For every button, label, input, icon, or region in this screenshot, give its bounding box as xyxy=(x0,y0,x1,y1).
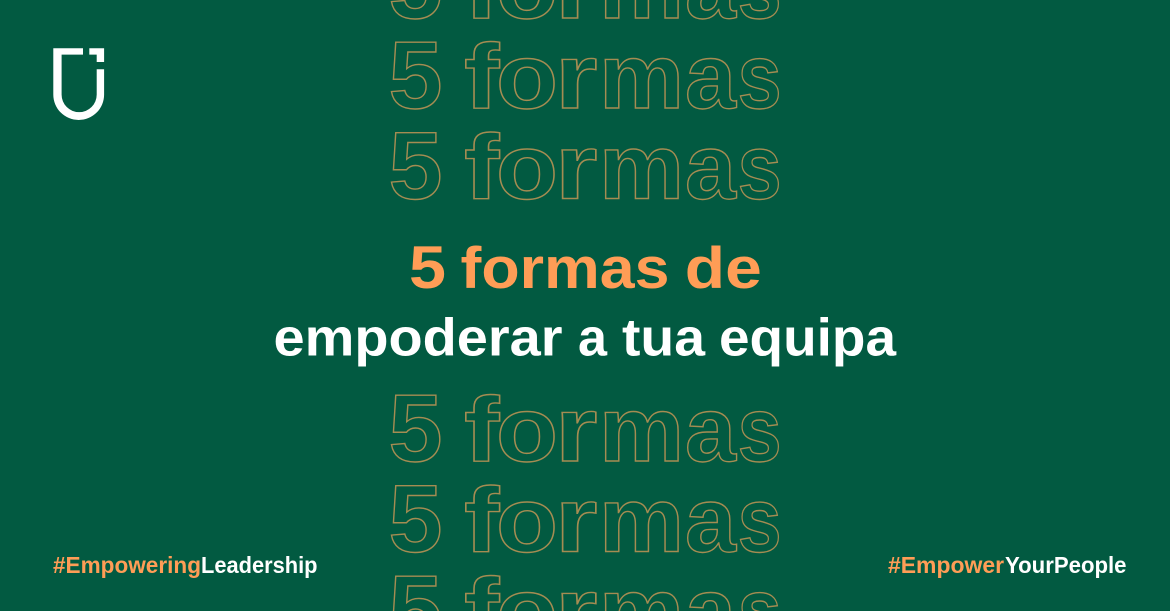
outlined repeated text: top group: f xyxy=(464,26,500,128)
hashtag: EmpowerYourPeople: YourPeople xyxy=(1005,552,1126,578)
outlined repeated text: top group: a xyxy=(685,26,737,128)
hashtag: EmpoweringLeadership xyxy=(53,552,318,578)
outlined repeated text: bottom group xyxy=(388,375,782,611)
subtitle: empoderar a tua equipa: a xyxy=(578,308,608,368)
subtitle: empoderar a tua equipa: equipa xyxy=(719,308,897,368)
title: 5 formas de: formas xyxy=(460,236,670,301)
hashtag: EmpowerYourPeople xyxy=(888,552,1126,578)
outlined repeated text: bottom group: 5 xyxy=(388,466,442,572)
outlined repeated text: bottom group: r xyxy=(555,470,598,572)
outlined repeated text: top group: o xyxy=(496,116,558,218)
outlined repeated text: top group: 5 xyxy=(388,22,442,129)
hashtag: EmpowerYourPeople: #Empower xyxy=(888,552,1004,578)
outlined repeated text: top group xyxy=(388,0,782,220)
outlined repeated text: bottom group: s xyxy=(738,470,782,572)
hashtag: EmpoweringLeadership: #Empowering xyxy=(53,552,201,578)
outlined repeated text: bottom group: o xyxy=(496,379,558,481)
outlined repeated text: bottom group: m xyxy=(599,379,684,481)
outlined repeated text: bottom group: f xyxy=(464,379,500,481)
outlined repeated text: top group: o xyxy=(496,26,558,128)
hashtag: EmpoweringLeadership: Leadership xyxy=(201,552,318,578)
outlined repeated text: bottom group: a xyxy=(685,470,737,572)
outlined repeated text: top group: f xyxy=(464,116,500,218)
title: 5 formas de xyxy=(409,234,762,301)
outlined repeated text: top group: s xyxy=(738,116,782,218)
title: 5 formas de: 5 xyxy=(409,234,446,301)
subtitle: empoderar a tua equipa: tua xyxy=(622,308,706,368)
outlined repeated text: top group: 5 xyxy=(388,112,442,220)
subtitle: empoderar a tua equipa: empoderar xyxy=(274,308,562,368)
outlined repeated text: top group: m xyxy=(599,26,684,128)
outlined repeated text: bottom group: r xyxy=(555,379,598,481)
outlined repeated text: bottom group: 5 xyxy=(388,375,442,482)
title: 5 formas de: de xyxy=(685,236,762,301)
outlined repeated text: top group: r xyxy=(555,116,598,218)
outlined repeated text: top group: a xyxy=(685,116,737,218)
outlined repeated text: bottom group: f xyxy=(464,470,500,572)
outlined repeated text: bottom group: o xyxy=(496,470,558,572)
outlined repeated text: top group: s xyxy=(738,26,782,128)
outlined repeated text: bottom group: s xyxy=(738,379,782,481)
subtitle: empoderar a tua equipa xyxy=(274,308,897,368)
outlined repeated text: top group: r xyxy=(555,26,598,128)
outlined repeated text: bottom group: m xyxy=(599,470,684,572)
logo: white U shield xyxy=(53,48,104,120)
outlined repeated text: top group: m xyxy=(599,116,684,218)
outlined repeated text: bottom group: a xyxy=(685,379,737,481)
